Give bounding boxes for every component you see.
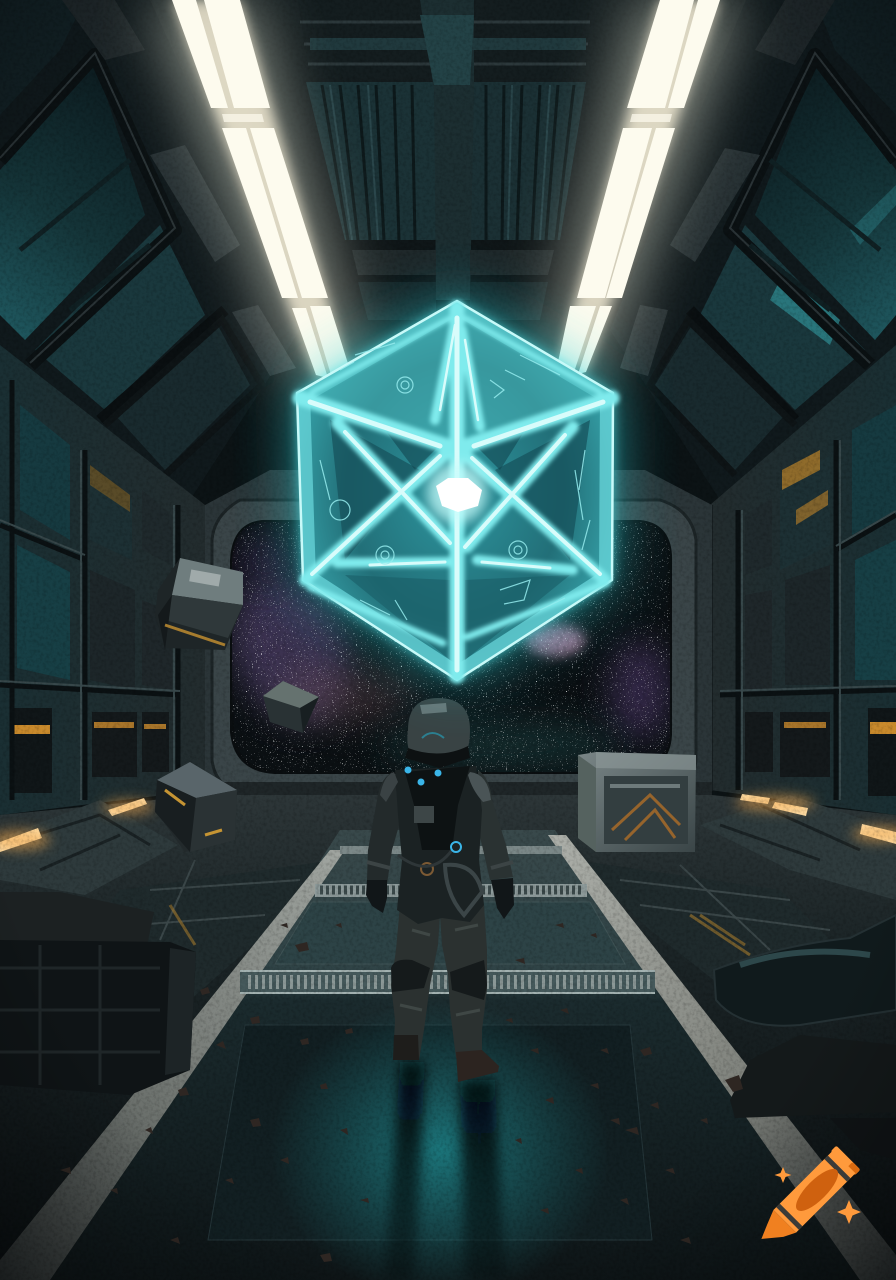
astronaut torso [380,766,491,924]
floor [0,795,896,1280]
logo: crayon with sparkles [752,1146,861,1254]
astronaut helmet [405,698,470,768]
cube hexagram struts [310,318,603,670]
back wall frame [205,470,712,815]
right lower wall [710,345,896,815]
crayon body [752,1146,860,1254]
wall light strips [0,794,896,852]
dark machinery right [714,915,896,1160]
right upper wall panels [610,0,896,500]
ceiling lights [150,0,740,385]
astronaut [366,698,514,1082]
debris on floor [60,923,743,1262]
cube strut glow [300,308,612,676]
sparkle large [837,1200,861,1224]
black crates bottom left [0,892,196,1095]
floating crate small [263,681,319,733]
sparkle small [774,1167,792,1183]
glowing cube [297,301,613,680]
astronaut arms and gloves [366,770,514,919]
ceiling [130,0,770,320]
floor crate left [155,762,237,852]
astronaut blue lights [404,766,461,852]
left lower wall [0,345,205,815]
astronaut legs [391,905,499,1082]
cube engravings [320,343,590,620]
metal crate right [578,752,696,852]
window with starfield and nebula [208,522,672,774]
left upper wall panels [0,0,300,500]
floating crate large [155,558,243,650]
